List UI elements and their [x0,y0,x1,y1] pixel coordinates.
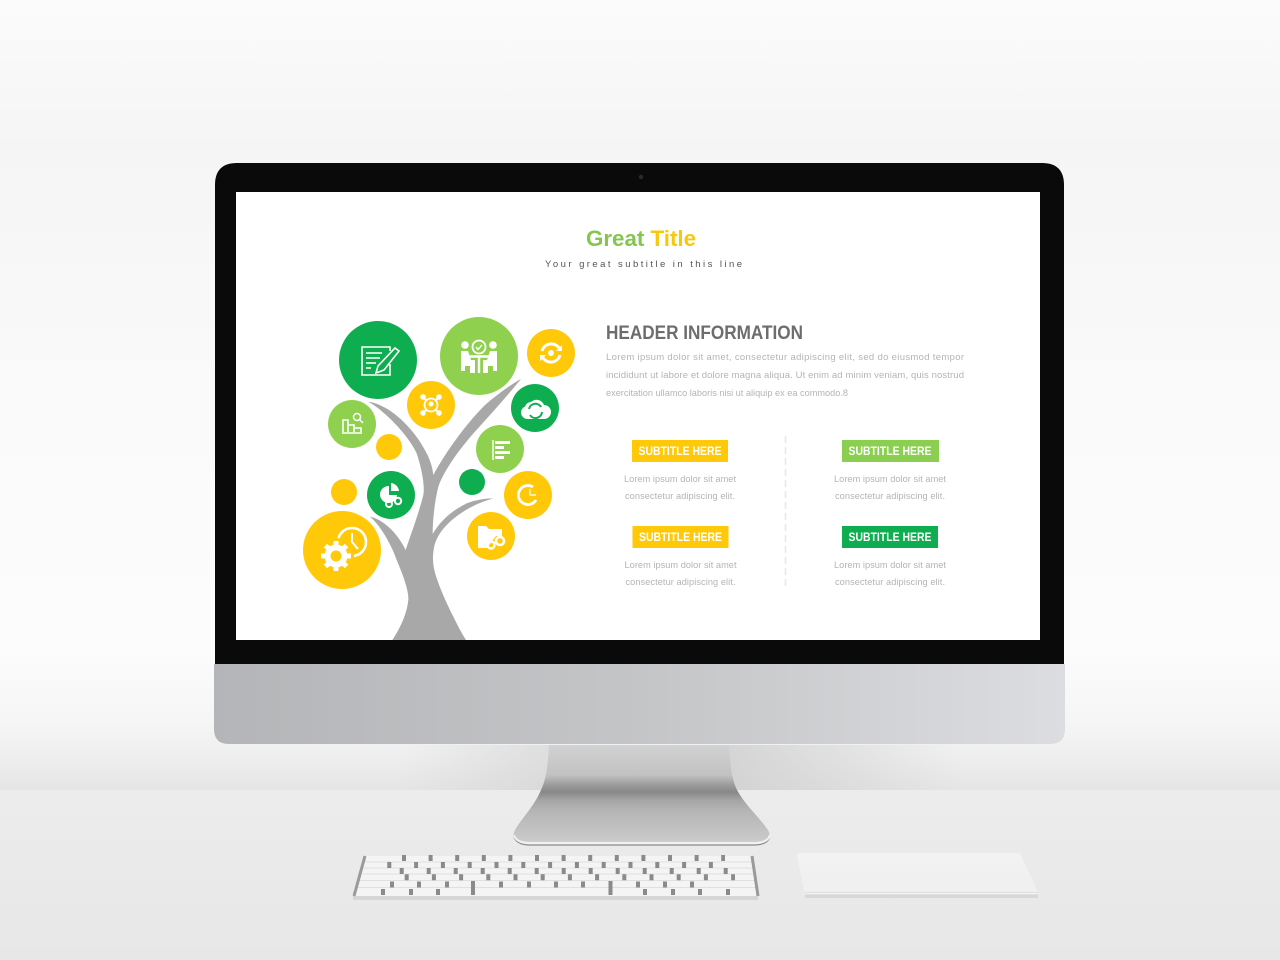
block: subtitle bottom right: Lorem ipsum dolor sit amet [834,560,946,570]
block: subtitle bottom left: SUBTITLE HERE [639,532,722,544]
circle: search chart [328,400,376,448]
circle: folder settings [467,512,515,560]
block: subtitle bottom right: consectetur adipiscing elit. [835,577,945,587]
body paragraph: incididunt ut labore et dolore magna aliqua. Ut enim ad minim veniam, quis nostrud [606,370,964,381]
block: subtitle top right: Lorem ipsum dolor sit amet [834,474,946,484]
wall shadow behind stand [400,745,960,790]
block: subtitle top left [624,440,736,501]
slide screen [236,192,1040,640]
title: Great Title [586,226,696,251]
circle: refresh [527,329,575,377]
dashed divider [784,436,786,586]
block: subtitle top left: consectetur adipiscing elit. [625,491,735,501]
body paragraph: exercitation ullamco laboris nisi ut aliquip ex ea commodo.8 [606,388,848,399]
webcam [639,175,643,179]
monitor bezel [215,163,1064,664]
tree trunk and branches [368,379,521,640]
block: subtitle bottom left: consectetur adipiscing elit. [626,577,736,587]
trackpad [797,853,1038,898]
block: subtitle top left: SUBTITLE HERE [638,446,722,458]
circle: bar list [476,425,524,473]
keyboard [353,856,758,900]
circle: small yellow far left [331,479,357,505]
block: subtitle bottom right [834,526,946,587]
block: subtitle top right: consectetur adipiscing elit. [835,491,945,501]
circle: small green [459,469,485,495]
monitor chin [214,664,1065,744]
block: subtitle top left: Lorem ipsum dolor sit amet [624,474,736,484]
tree illustration [303,317,575,640]
block: subtitle bottom left: Lorem ipsum dolor sit amet [624,560,737,570]
circle: network user [407,381,455,429]
block: subtitle bottom left [624,526,737,587]
circle: meeting [440,317,518,395]
subtitle: Your great subtitle in this line [545,259,742,270]
body paragraph: Lorem ipsum dolor sit amet, consectetur adipiscing elit, sed do eiusmod tempor [606,352,964,363]
block: subtitle top right: SUBTITLE HERE [848,446,932,458]
block: subtitle bottom right: SUBTITLE HERE [848,532,932,544]
circle: notes [339,321,417,399]
monitor stand [513,745,770,845]
body paragraph [606,352,964,399]
circle: gear clock [303,511,381,589]
circle: donut [504,471,552,519]
circle: pie settings [367,471,415,519]
background: desk [0,790,1280,960]
block: subtitle top right [834,440,946,501]
circle: small yellow left [376,434,402,460]
header information: HEADER INFORMATION [606,323,803,344]
circle: cloud sync [511,384,559,432]
